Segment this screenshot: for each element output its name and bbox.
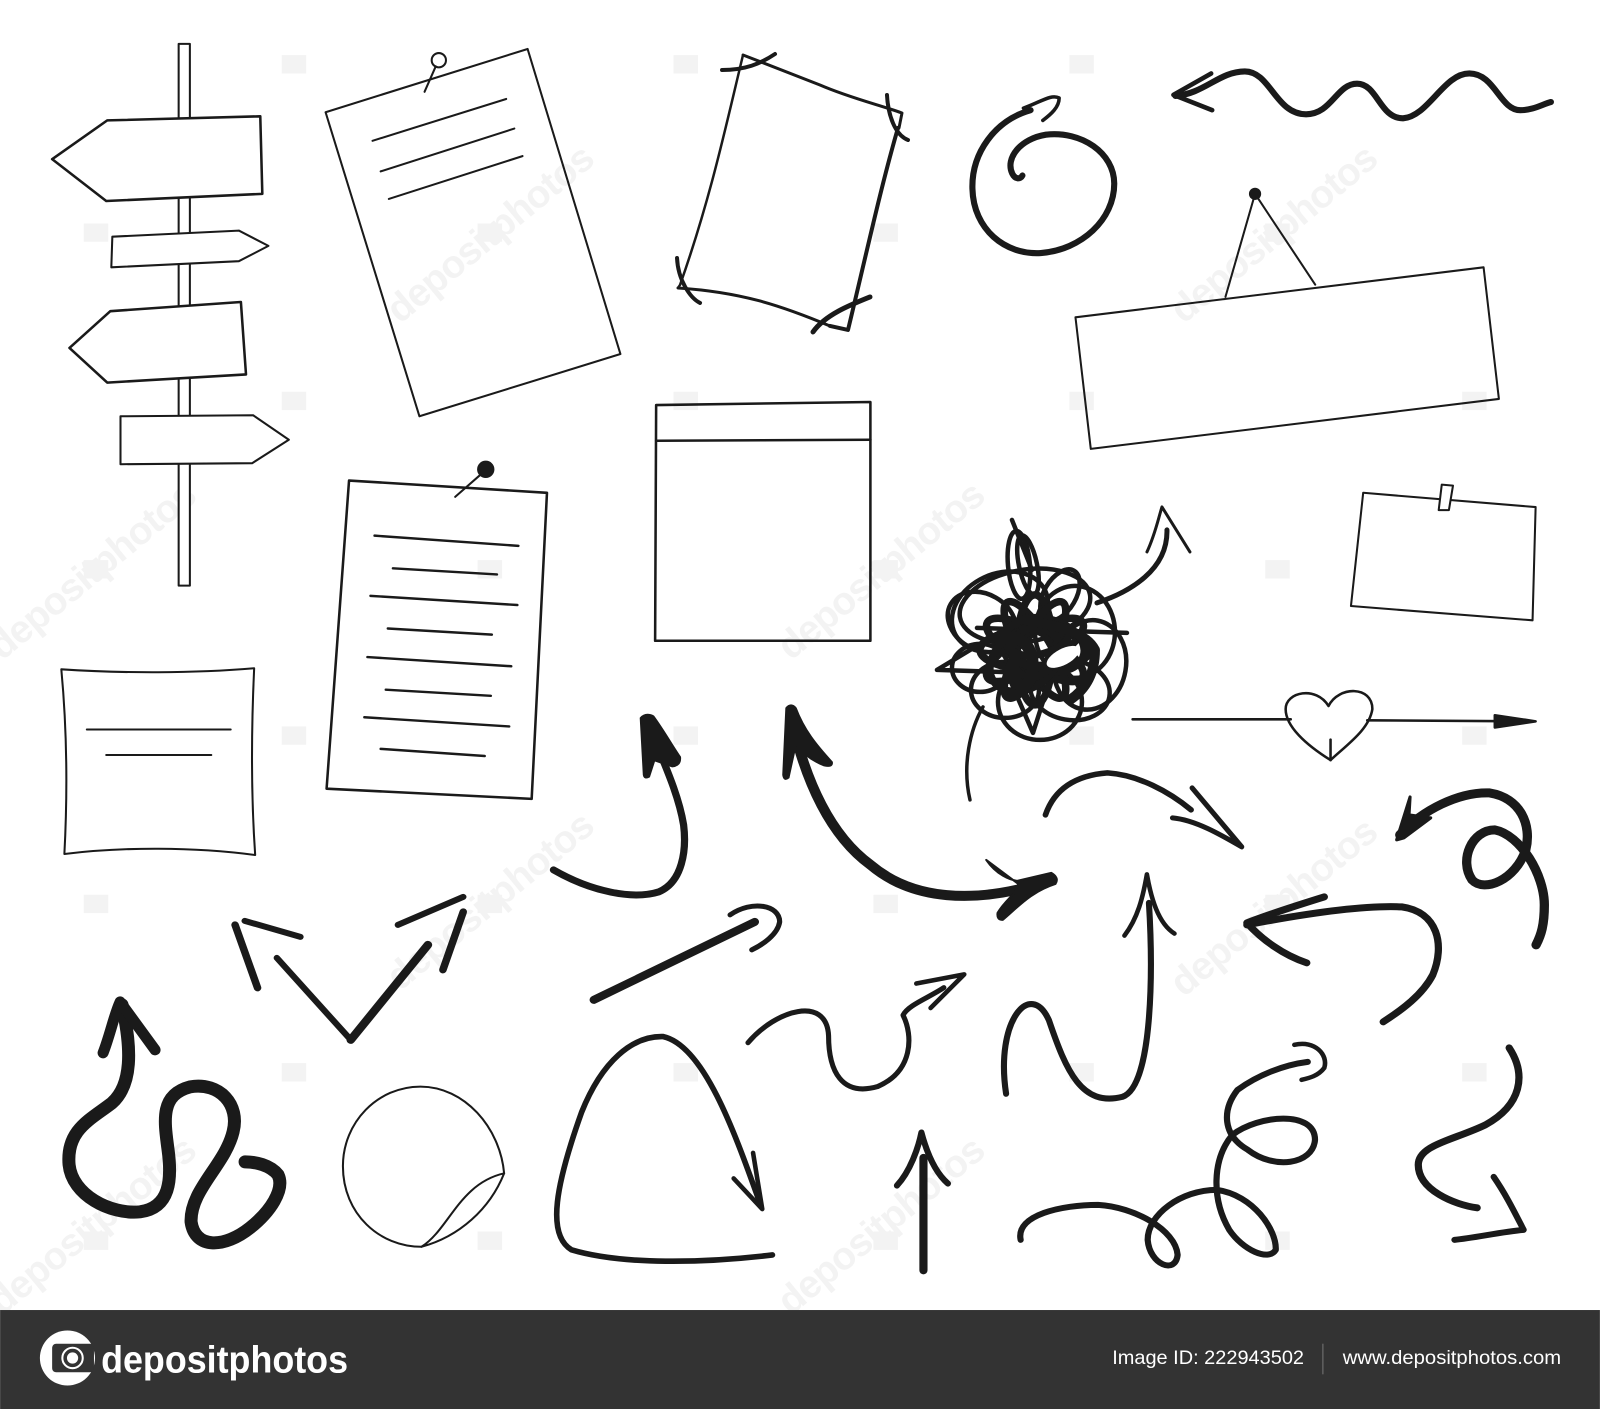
tabbed square [655,402,870,641]
image id: Image ID: 222943502 [1112,1347,1304,1369]
sticky note [61,668,255,855]
signpost [52,44,289,586]
pinned lined document [327,462,547,799]
hanging sign [1075,189,1499,449]
watermark: depositphotos [1162,809,1386,1005]
peeling sticker [343,1087,504,1247]
arrow: squiggle right [748,974,964,1089]
watermark: depositphotos [769,1128,993,1323]
logo wordmark: depositphotos [101,1338,348,1380]
footer bar [0,1310,1600,1409]
website: www.depositphotos.com [1342,1347,1561,1369]
heart line arrow [1133,691,1536,760]
pinned note with lines [326,49,620,416]
arrow: left hook [1247,897,1438,1022]
watermark: depositphotos [378,136,603,331]
arrow: straight up [897,1133,948,1270]
arrow: arc right [1045,773,1242,847]
taped frame [677,54,908,332]
arrow: coil [1020,1044,1325,1265]
logo icon [40,1330,95,1386]
watermark: depositphotos [1162,136,1386,331]
spiral arrow circle [972,97,1114,253]
arrow: loop left [1397,793,1544,945]
scribble with arrow [937,507,1190,800]
wavy left arrow [1173,71,1551,118]
taped card [1351,485,1536,620]
arrow: serpentine up [69,1002,280,1243]
arrow: double headed curve [783,705,1057,920]
arrow: S down [1418,1048,1524,1240]
watermark: depositphotos [378,803,603,999]
arrow: diagonal pin [594,906,780,1000]
arrow: triangle loop [557,1037,772,1261]
watermark: depositphotos [769,473,993,668]
arrow: J up [553,714,685,895]
arrows: V shape [235,897,463,1040]
arrow: up with wave [1004,874,1174,1099]
